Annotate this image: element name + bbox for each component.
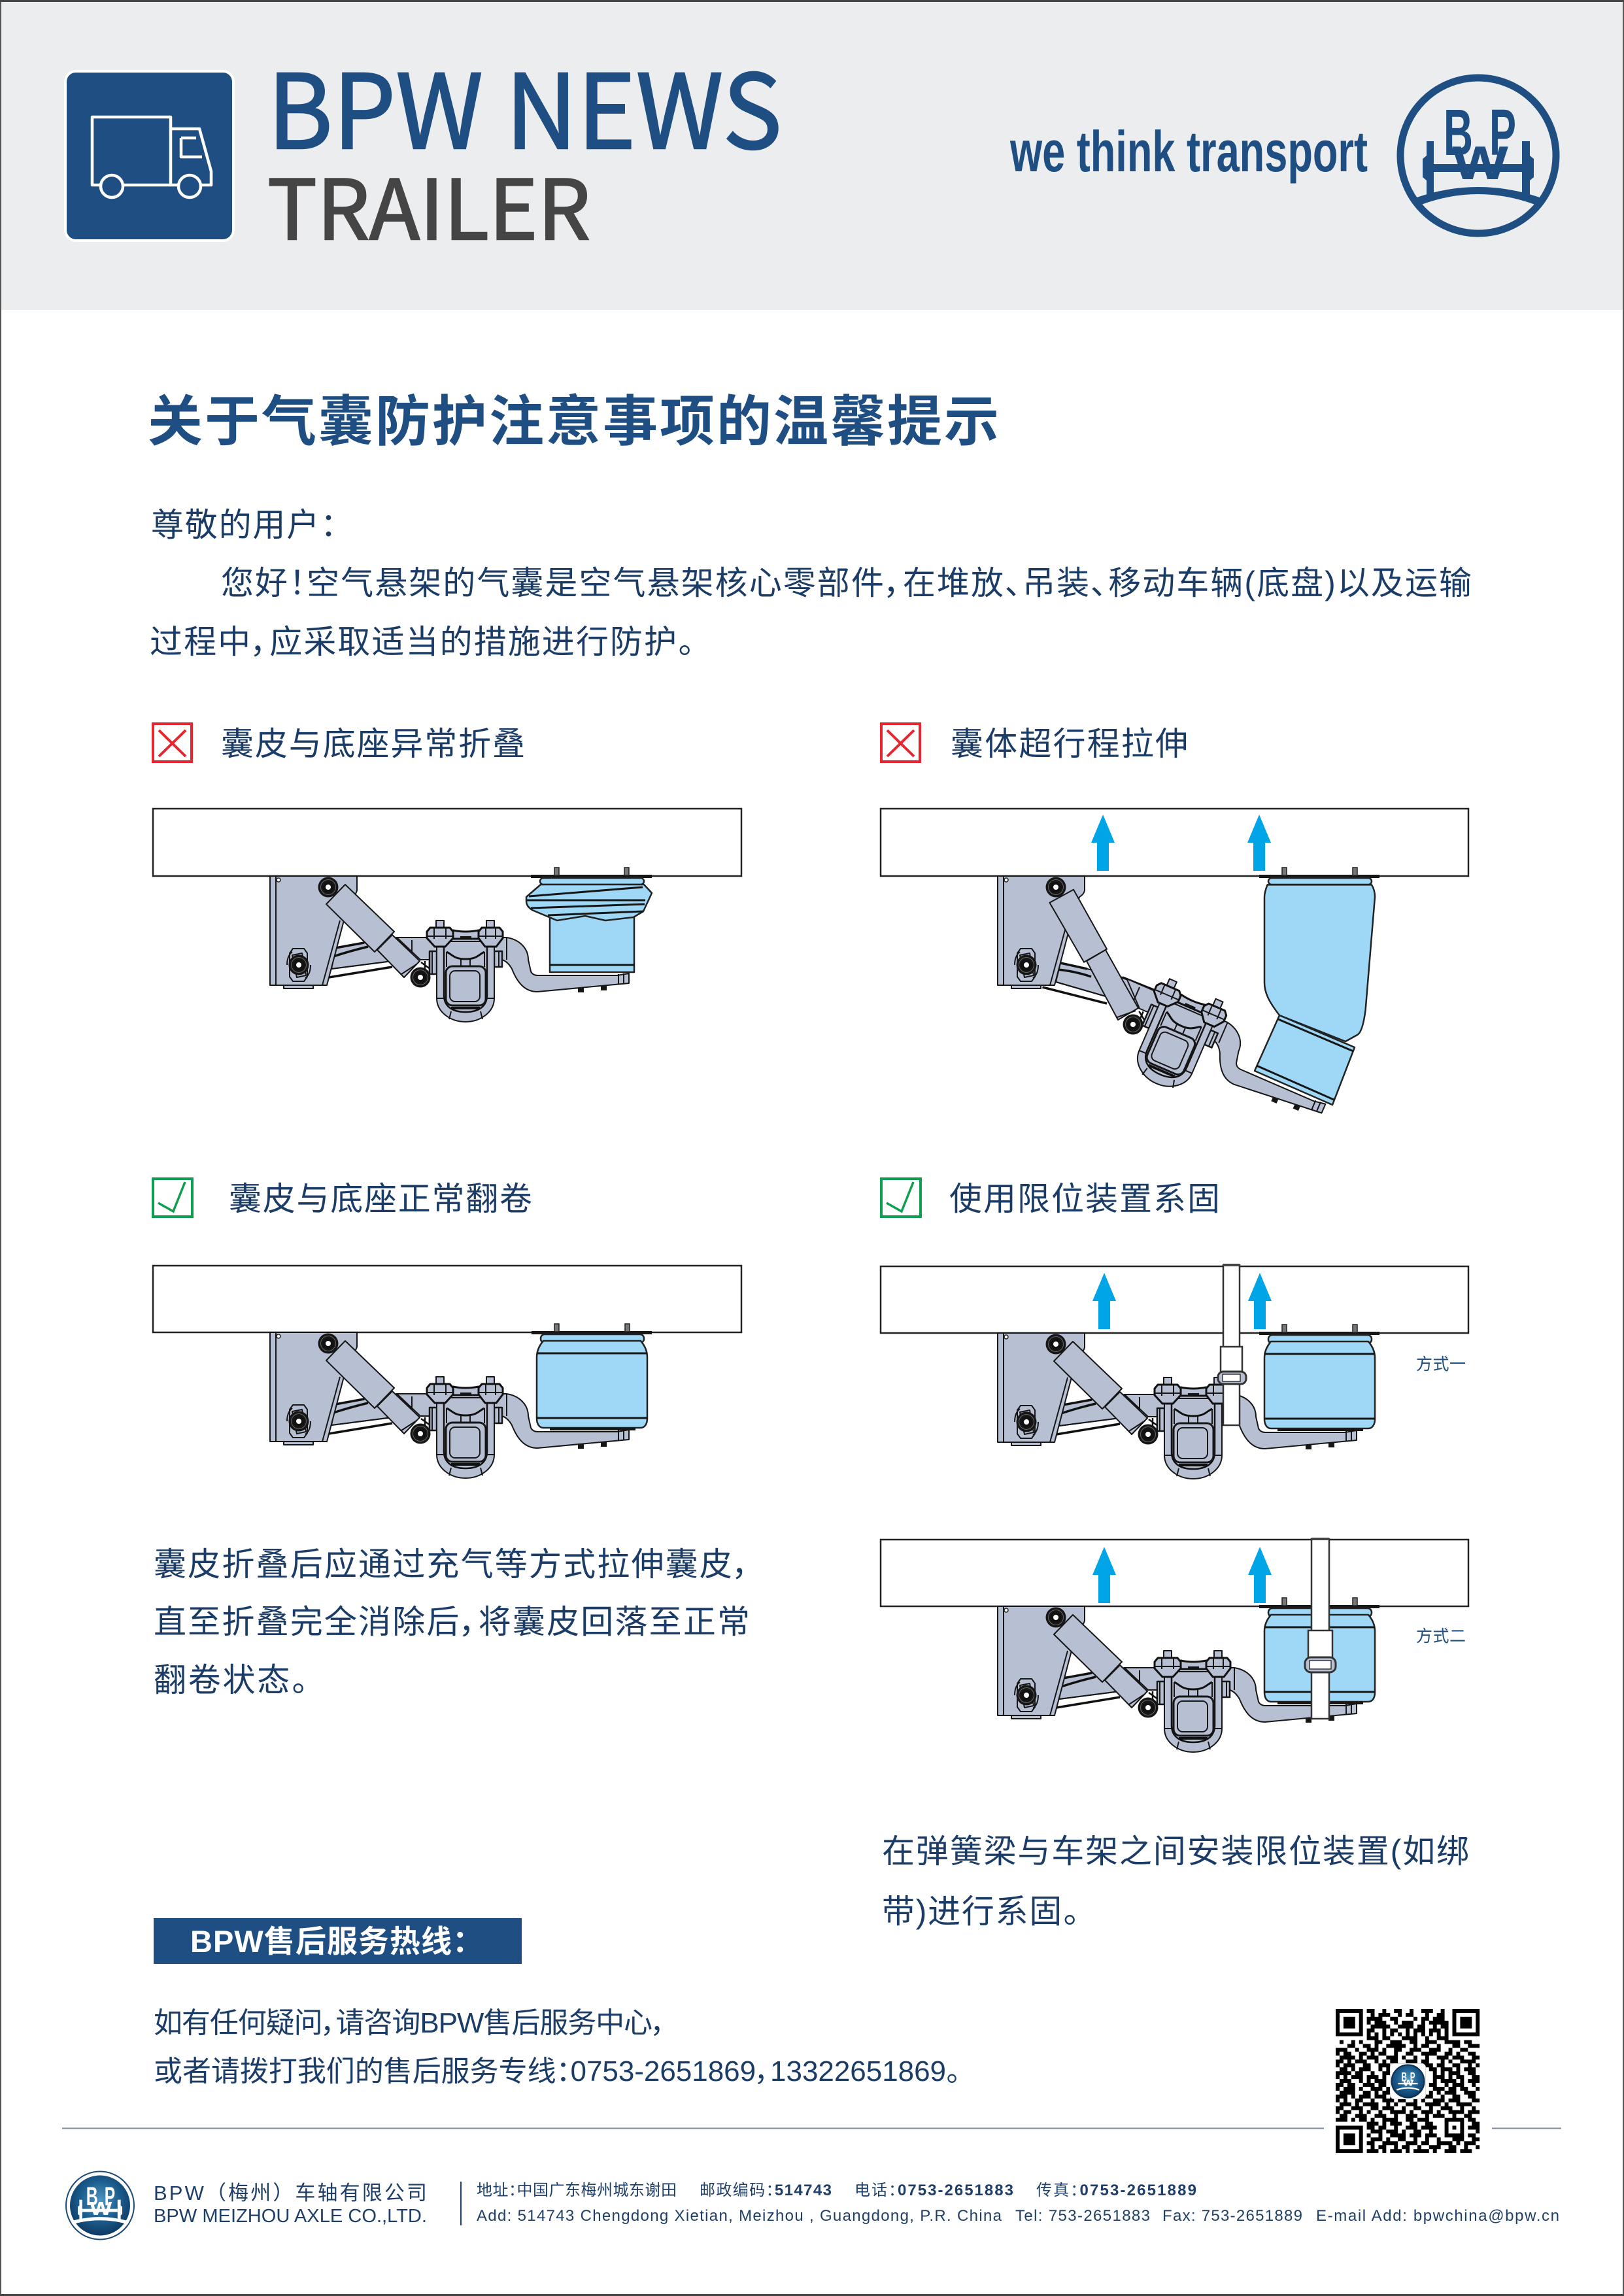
contact: Chinese: 电话：0753-2651883 bbox=[854, 2182, 1013, 2199]
footer bbox=[66, 2172, 1559, 2240]
slogan: we think transport bbox=[1009, 119, 1368, 184]
icon: footer BPW logo bbox=[66, 2172, 134, 2240]
icon: green check bbox=[153, 1179, 192, 1217]
contact: Chinese: 传真：0753-2651889 bbox=[1036, 2182, 1196, 2199]
diagram: method one bbox=[881, 1264, 1468, 1479]
left paragraph: 直至折叠完全消除后，将囊皮回落至正常 bbox=[154, 1604, 750, 1640]
heading: 囊体超行程拉伸 bbox=[951, 726, 1188, 762]
left paragraph: 囊皮折叠后应通过充气等方式拉伸囊皮， bbox=[154, 1546, 750, 1583]
icon: truck badge bbox=[65, 71, 233, 241]
label: method two: 方式二 bbox=[1416, 1627, 1466, 1646]
contact: English: Fax: 753-2651889 bbox=[1162, 2207, 1302, 2225]
panel: restraint device bbox=[881, 1179, 1468, 1752]
hotline banner: BPW售后服务热线： bbox=[190, 1924, 483, 1959]
company name bbox=[154, 2182, 427, 2227]
right paragraph: 带)进行系固。 bbox=[882, 1893, 1079, 1930]
right paragraph bbox=[882, 1833, 1469, 1930]
greeting text block: 过程中，应采取适当的措施进行防护。 bbox=[150, 624, 694, 660]
icon: QR centre logo: W bbox=[1403, 2078, 1413, 2087]
icon: footer BPW logo: B bbox=[86, 2182, 98, 2211]
icon: red cross bbox=[881, 724, 920, 762]
panel: over-stretched air bag bbox=[881, 724, 1468, 1149]
header band bbox=[0, 0, 1624, 310]
hotline text: 或者请拨打我们的售后服务专线：0753-2651869，13322651869。 bbox=[154, 2055, 960, 2087]
icon: QR centre logo: B bbox=[1401, 2070, 1407, 2084]
heading: 囊皮与底座正常翻卷 bbox=[229, 1181, 532, 1217]
heading: 使用限位装置系固 bbox=[949, 1181, 1220, 1217]
contact: Chinese: 地址：中国广东梅州城东谢田 bbox=[477, 2182, 677, 2199]
icon: BPW logo: P bbox=[1489, 96, 1516, 169]
heading: 囊皮与底座异常折叠 bbox=[221, 726, 525, 762]
icon: BPW logo bbox=[1400, 78, 1556, 233]
contact: Chinese: 邮政编码：514743 bbox=[700, 2182, 832, 2199]
left paragraph bbox=[154, 1546, 750, 1698]
contact: English: E-mail Add: bpwchina@bpw.cn bbox=[1316, 2207, 1559, 2225]
diagram: method two bbox=[881, 1538, 1468, 1752]
diagram: stretched air bag bbox=[881, 809, 1468, 1149]
icon: green check bbox=[881, 1179, 921, 1217]
contact: Chinese bbox=[477, 2182, 1196, 2199]
left paragraph: 翻卷状态。 bbox=[154, 1662, 308, 1698]
QR code bbox=[1326, 1999, 1489, 2163]
greeting text block: 您好！空气悬架的气囊是空气悬架核心零部件，在堆放、吊装、移动车辆(底盘)以及运输 bbox=[221, 565, 1472, 601]
right paragraph: 在弹簧梁与车架之间安装限位装置(如绑 bbox=[882, 1833, 1469, 1870]
icon: QR centre logo: P bbox=[1410, 2070, 1415, 2084]
diagram: normal air bag bbox=[153, 1266, 741, 1478]
company name: BPW（梅州）车轴有限公司 bbox=[154, 2182, 427, 2204]
footer separator bbox=[460, 2182, 462, 2225]
hotline text bbox=[154, 2007, 960, 2087]
company name: BPW MEIZHOU AXLE CO.,LTD. bbox=[154, 2206, 427, 2227]
hotline text: 如有任何疑问，请咨询BPW售后服务中心， bbox=[154, 2007, 666, 2039]
contact: English bbox=[477, 2207, 1559, 2225]
greeting text block: 尊敬的用户： bbox=[151, 507, 337, 543]
icon: footer BPW logo: W bbox=[90, 2199, 112, 2220]
icon: red cross bbox=[153, 724, 192, 762]
main title: 关于气囊防护注意事项的温馨提示 bbox=[148, 391, 999, 452]
icon: BPW logo: B bbox=[1444, 96, 1473, 169]
footer divider bbox=[62, 2127, 1561, 2129]
contact: English: Add: 514743 Chengdong Xietian, Meizhou , Guangdong, P.R. China bbox=[477, 2207, 1002, 2225]
icon: QR centre logo bbox=[1390, 2063, 1425, 2099]
diagram: folded air bag bbox=[153, 809, 741, 1022]
header title: BPW NEWS: BPW NEWS bbox=[267, 30, 782, 178]
panel: normal rolling bbox=[153, 1179, 741, 1478]
contact: English: Tel: 753-2651883 bbox=[1015, 2207, 1150, 2225]
greeting text block bbox=[150, 507, 1472, 660]
icon: footer BPW logo: P bbox=[105, 2182, 115, 2211]
hotline banner bbox=[154, 1918, 522, 1964]
icon: BPW logo: W bbox=[1452, 137, 1508, 190]
header subtitle: TRAILER: TRAILER bbox=[267, 144, 590, 263]
label: method one: 方式一 bbox=[1416, 1355, 1466, 1374]
panel: abnormal folding bbox=[153, 724, 741, 1022]
